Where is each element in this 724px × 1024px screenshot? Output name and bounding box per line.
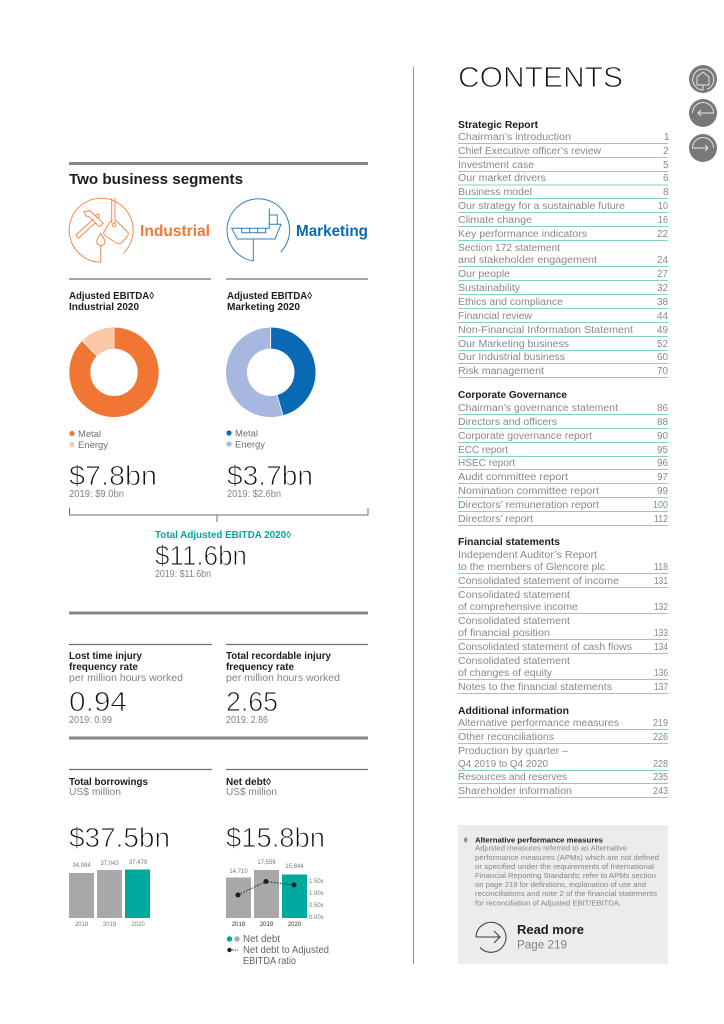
combo chart: net debt: 15,844	[285, 864, 304, 870]
section: additional information contents: Resources and reserves	[458, 772, 567, 783]
section: corporate governance contents: Corporate governance report	[458, 431, 592, 442]
combo chart: net debt: 2020	[288, 922, 302, 928]
heading: two business segments: Two business segments	[69, 171, 243, 188]
section: strategic report contents: 49	[657, 325, 668, 336]
section: strategic report contents: 16	[658, 215, 668, 226]
text block: APM explanation: Adjusted measures referred to as Alternative	[475, 844, 627, 852]
section: strategic report contents: Climate change	[458, 215, 532, 226]
bar chart: total borrowings: 2019	[103, 922, 117, 928]
icon: forward button	[689, 134, 717, 162]
heading: total borrowings: Total borrowings	[69, 777, 148, 788]
metric: lost time injury frequency rate: 0.94	[69, 686, 127, 717]
heading: strategic report: Strategic Report	[458, 120, 539, 131]
text: industrial EBITDA heading	[69, 291, 154, 313]
donut chart: industrial	[80, 328, 148, 406]
section: financial statements contents: Consolidated statement	[458, 616, 570, 627]
legend: net debt	[227, 934, 329, 967]
combo chart: net debt: 1.00x	[309, 891, 324, 897]
section: additional information contents: Q4 2019 to Q4 2020	[458, 759, 548, 770]
section: corporate governance contents: Audit committee report	[458, 472, 568, 483]
icon: industrial	[69, 198, 133, 262]
text: industrial EBITDA heading: Industrial 2020	[69, 302, 139, 313]
metric: industrial EBITDA: $7.8bn	[69, 460, 157, 491]
metric: total recordable injury frequency rate: per million hours worked	[226, 673, 340, 684]
metric: lost time injury frequency rate: per million hours worked	[69, 673, 183, 684]
section: corporate governance contents: 86	[657, 403, 668, 414]
metric: lost time injury frequency rate: frequency rate	[69, 662, 138, 673]
section: corporate governance contents	[458, 390, 668, 526]
section: strategic report contents: and stakeholder engagement	[458, 255, 597, 266]
section: corporate governance contents: Directors and officers	[458, 417, 557, 428]
icon: read more arrow	[476, 922, 506, 952]
metric: total adjusted EBITDA	[155, 530, 291, 580]
bracket	[70, 508, 368, 522]
section: strategic report contents: Section 172 statement	[458, 243, 560, 254]
section: strategic report contents: 2	[663, 146, 669, 157]
section: financial statements contents: 118	[654, 562, 668, 573]
section: strategic report contents: 70	[657, 366, 668, 377]
section: strategic report contents: 52	[657, 339, 668, 350]
heading: corporate governance: Corporate Governance	[458, 390, 567, 401]
section: corporate governance contents: 99	[657, 486, 668, 497]
heading: additional information: Additional information	[458, 706, 569, 717]
callout: alternative performance measures	[458, 825, 668, 964]
text: marketing EBITDA heading: Marketing 2020	[227, 302, 300, 313]
panel: safety metrics	[69, 613, 368, 738]
bar chart: total borrowings: 37,043	[100, 861, 119, 867]
legend: marketing	[226, 428, 266, 450]
metric: lost time injury frequency rate	[69, 651, 183, 726]
section: strategic report contents: Sustainability	[458, 283, 520, 294]
section: strategic report contents: 38	[657, 297, 668, 308]
combo chart: net debt: 2019	[260, 922, 274, 928]
section: strategic report contents	[458, 120, 670, 378]
section: strategic report contents: 24	[657, 255, 668, 266]
heading: net debt: Net debt◊	[226, 777, 271, 788]
metric: lost time injury frequency rate: Lost time injury	[69, 651, 142, 662]
section: strategic report contents: Our people	[458, 269, 510, 280]
section: financial statements contents: of comprehensive income	[458, 602, 578, 613]
metric: total recordable injury frequency rate: 2.65	[226, 686, 278, 717]
section: strategic report contents: 44	[657, 311, 668, 322]
icon: back button	[689, 99, 717, 127]
section: financial statements contents: 131	[654, 576, 668, 587]
section: strategic report contents: Business model	[458, 187, 532, 198]
title: contents: CONTENTS	[458, 62, 623, 94]
section: strategic report contents: 32	[657, 283, 668, 294]
label: industrial: Industrial	[140, 223, 210, 240]
section: strategic report contents: Investment case	[458, 160, 534, 171]
donut chart: marketing	[237, 328, 305, 416]
section: strategic report contents: Chief Executive officer’s review	[458, 146, 602, 157]
section: additional information contents: Shareholder information	[458, 786, 572, 797]
bar chart: total borrowings: 34,994	[72, 863, 91, 869]
section: additional information contents: 243	[653, 786, 668, 797]
legend: industrial: Metal	[78, 429, 101, 439]
section: corporate governance contents: 100	[653, 500, 668, 511]
callout: alternative performance measures: Alternative performance measures	[475, 836, 603, 844]
heading: net debt: US$ million	[226, 787, 277, 798]
section: financial statements contents: 132	[654, 602, 668, 613]
panel: net debt	[226, 770, 368, 967]
section: corporate governance contents: 95	[657, 445, 668, 456]
section: corporate governance contents: Nomination committee report	[458, 486, 599, 497]
section: financial statements contents: Consolidated statement	[458, 656, 570, 667]
bar chart: total borrowings	[69, 860, 150, 928]
section: strategic report contents: Our strategy for a sustainable future	[458, 201, 625, 212]
section: strategic report contents: Our market drivers	[458, 173, 546, 184]
section: financial statements contents: 137	[654, 682, 668, 693]
combo chart: net debt: 17,556	[257, 860, 276, 866]
section: strategic report contents: 22	[657, 229, 668, 240]
panel: two business segments	[69, 164, 368, 580]
section: corporate governance contents: 88	[657, 417, 668, 428]
section: financial statements contents: of changes of equity	[458, 668, 552, 679]
metric: total adjusted EBITDA: Total Adjusted EBITDA 2020◊	[155, 530, 291, 541]
section: financial statements contents: to the members of Glencore plc	[458, 562, 605, 573]
combo chart: net debt: 0.00x	[309, 915, 324, 921]
metric: marketing EBITDA: 2019: $2.6bn	[227, 489, 281, 500]
section: corporate governance contents: HSEC report	[458, 458, 515, 469]
link: read more	[517, 922, 584, 952]
section: strategic report contents: Chairman’s introduction	[458, 132, 571, 143]
metric: total recordable injury frequency rate: 2019: 2.86	[226, 715, 268, 726]
metric: total recordable injury frequency rate: Total recordable injury	[226, 651, 331, 662]
section: strategic report contents: Risk management	[458, 366, 544, 377]
section: financial statements contents: Consolidated statement of cash flows	[458, 642, 632, 653]
text: industrial EBITDA heading: Adjusted EBITDA◊	[69, 291, 154, 302]
section: strategic report contents: 1	[664, 132, 670, 143]
section: corporate governance contents: Directors’ remuneration report	[458, 500, 599, 511]
section: additional information contents: 226	[653, 732, 668, 743]
section: additional information contents: 219	[653, 718, 668, 729]
section: corporate governance contents: Directors’ report	[458, 514, 533, 525]
heading: total borrowings	[69, 777, 148, 798]
bar chart: total borrowings: 2020	[131, 922, 145, 928]
section: corporate governance contents: 96	[657, 458, 668, 469]
metric: net debt value: $15.8bn	[226, 822, 325, 853]
icon: home button	[689, 65, 717, 93]
section: strategic report contents: 60	[657, 352, 668, 363]
combo chart: net debt	[226, 860, 324, 928]
heading: financial statements: Financial statements	[458, 537, 560, 548]
section: corporate governance contents: 112	[654, 514, 668, 525]
section: strategic report contents: Non-Financial Information Statement	[458, 325, 633, 336]
text block: APM explanation	[475, 844, 659, 908]
section: financial statements contents: Consolidated statement	[458, 590, 570, 601]
metric: industrial EBITDA: 2019: $9.0bn	[69, 489, 124, 500]
section: additional information contents: 235	[653, 772, 668, 783]
section: financial statements contents: Consolidated statement of income	[458, 576, 619, 587]
section: financial statements contents: of financial position	[458, 628, 550, 639]
metric: total borrowings value: $37.5bn	[69, 822, 170, 853]
text block: APM explanation: Financial Reporting Standards; refer to APMs section	[475, 871, 656, 880]
section: strategic report contents: Our Industrial business	[458, 352, 565, 363]
section: corporate governance contents: 97	[657, 472, 668, 483]
section: additional information contents	[458, 706, 668, 798]
section: additional information contents: Other reconciliations	[458, 732, 554, 743]
heading: net debt	[226, 777, 277, 798]
section: strategic report contents: 27	[657, 269, 668, 280]
callout: alternative performance measures: ◊	[464, 838, 468, 844]
section: strategic report contents: Our Marketing business	[458, 339, 569, 350]
metric: total adjusted EBITDA: $11.6bn	[155, 540, 247, 571]
panel: total borrowings	[69, 770, 212, 928]
section: additional information contents: 228	[653, 759, 668, 770]
section: additional information contents: Production by quarter –	[458, 746, 568, 757]
metric: total recordable injury frequency rate: frequency rate	[226, 662, 294, 673]
metric: total recordable injury frequency rate	[226, 651, 340, 726]
section: strategic report contents: 10	[658, 201, 668, 212]
metric: marketing EBITDA: $3.7bn	[227, 460, 313, 491]
combo chart: net debt: 1.50x	[309, 879, 324, 885]
section: financial statements contents: Independent Auditor’s Report	[458, 550, 597, 561]
metric: lost time injury frequency rate: 2019: 0.99	[69, 715, 112, 726]
section: strategic report contents: Key performance indicators	[458, 229, 587, 240]
text block: APM explanation: or specified under the requirements of International	[475, 862, 654, 871]
legend: marketing: Metal	[235, 428, 258, 438]
combo chart: net debt: 0.50x	[309, 903, 324, 909]
legend: marketing: Energy	[235, 440, 266, 450]
metric: total adjusted EBITDA: 2019: $11.6bn	[155, 569, 211, 580]
section: strategic report contents: 5	[663, 160, 669, 171]
section: financial statements contents: 134	[654, 642, 668, 653]
text: marketing EBITDA heading	[227, 291, 312, 313]
icon: marketing ship	[227, 199, 290, 261]
section: strategic report contents: Financial review	[458, 311, 533, 322]
section: financial statements contents: Notes to the financial statements	[458, 682, 612, 693]
legend: industrial: Energy	[78, 440, 109, 450]
link: read more: Page 219	[517, 938, 567, 952]
section: financial statements contents: 136	[654, 668, 668, 679]
text block: APM explanation: for reconciliation of Adjusted EBIT/EBITDA.	[475, 898, 621, 908]
text: marketing EBITDA heading: Adjusted EBITDA◊	[227, 291, 312, 302]
section: financial statements contents: 133	[654, 628, 668, 639]
section: corporate governance contents: ECC report	[458, 445, 508, 456]
bar chart: total borrowings: 2018	[75, 922, 89, 928]
heading: total borrowings: US$ million	[69, 787, 121, 798]
text block: APM explanation: performance measures (APMs) which are not defined	[475, 853, 659, 862]
section: additional information contents: Alternative performance measures	[458, 718, 619, 729]
label: marketing: Marketing	[296, 223, 368, 240]
section: strategic report contents: Ethics and compliance	[458, 297, 563, 308]
section: financial statements contents	[458, 537, 668, 694]
text block: APM explanation: on page 219 for definitions, explanation of use and	[475, 880, 646, 889]
section: strategic report contents: 8	[663, 187, 669, 198]
legend: net debt: EBITDA ratio	[243, 956, 296, 967]
combo chart: net debt: 2018	[232, 922, 246, 928]
text block: APM explanation: reconciliations and note 2 of the financial statements	[475, 889, 657, 898]
section: corporate governance contents: Chairman’s governance statement	[458, 403, 618, 414]
link: read more: Read more	[517, 922, 584, 937]
bar chart: total borrowings: 37,479	[129, 860, 148, 866]
section: corporate governance contents: 90	[657, 431, 668, 442]
legend: net debt: Net debt to Adjusted	[243, 945, 329, 956]
combo chart: net debt: 14,710	[229, 869, 248, 875]
legend: net debt: Net debt	[243, 934, 280, 945]
section: strategic report contents: 6	[663, 173, 669, 184]
legend: industrial	[69, 429, 109, 450]
